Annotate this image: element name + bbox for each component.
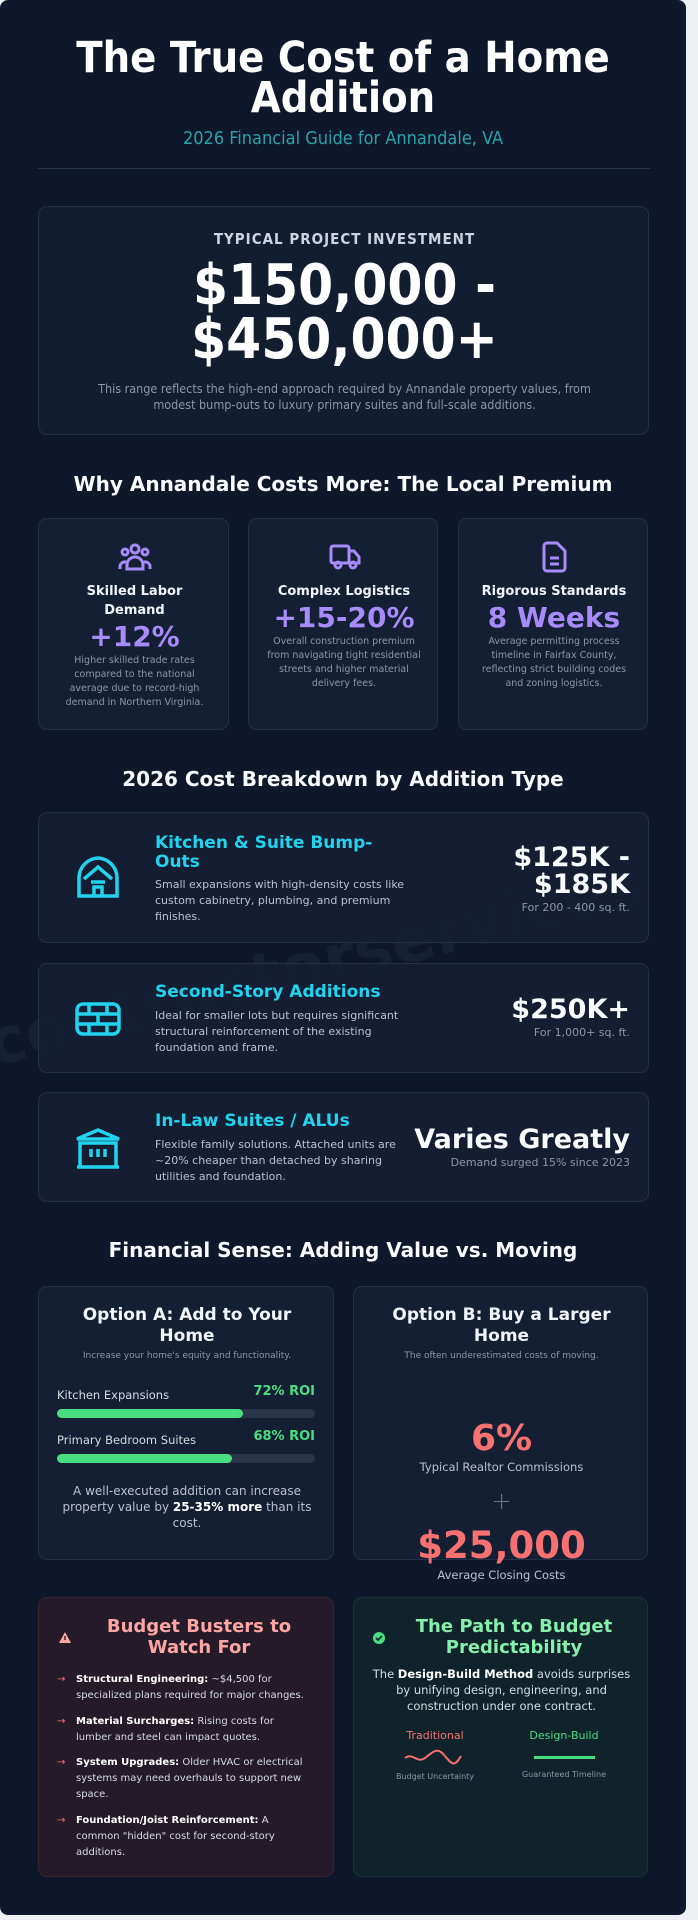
text: from navigating tight residential — [267, 650, 421, 661]
text: timeline in Fairfax County, — [492, 650, 616, 661]
bar: kitchen — [57, 1384, 315, 1418]
title: Predictability — [446, 1637, 582, 1658]
text: Overall construction premium — [273, 636, 415, 647]
text: Average permitting process — [488, 636, 620, 647]
price: $125K - — [513, 842, 630, 873]
title: Option A: Add to Your — [83, 1305, 291, 1325]
list: Material Surcharges: Rising costs for lumber and steel can impact quotes. — [76, 1716, 274, 1742]
text: +12% — [89, 620, 180, 653]
list — [57, 1674, 304, 1858]
icon: truck — [330, 544, 360, 570]
panel: design-build — [353, 1597, 648, 1877]
text: Small expansions with high-density costs like custom cabinetry, plumbing, and premium finishes. — [155, 878, 404, 923]
text: and zoning logistics. — [505, 678, 603, 689]
stat: closing costs: $25,000 — [417, 1524, 586, 1567]
heading: cost breakdown: 2026 Cost Breakdown by Addition Type — [122, 767, 564, 791]
text: Higher skilled trade rates — [74, 655, 195, 666]
stat: closing costs: Average Closing Costs — [437, 1568, 566, 1582]
text: Skilled Labor — [87, 584, 182, 599]
text — [155, 833, 404, 923]
bar: primary suites: Primary Bedroom Suites — [57, 1433, 196, 1447]
comparison: traditional — [396, 1729, 474, 1781]
text: Second-Story Additions — [155, 982, 380, 1002]
comparison: design-build: Design-Build — [529, 1729, 599, 1742]
price: For 1,000+ sq. ft. — [534, 1026, 630, 1039]
label: TYPICAL PROJECT INVESTMENT — [214, 230, 475, 248]
icon: document — [542, 542, 566, 572]
panel: option A: Increase your home's equity and functionality. — [83, 1351, 291, 1361]
note: A well-executed addition can increase property value by 25-35% more than its cost. — [63, 1484, 311, 1530]
list: → — [57, 1674, 65, 1685]
comparison: design-build — [522, 1729, 606, 1778]
text: Demand — [104, 603, 165, 618]
bar: primary suites: 68% ROI — [253, 1429, 315, 1444]
description: This range reflects the high-end approach required by Annandale property values, from modest bump-outs to luxury primary suites and full-scale additions. — [98, 381, 591, 412]
title — [76, 33, 610, 123]
icon: warning — [59, 1632, 71, 1643]
stat: commissions: Typical Realtor Commissions — [420, 1460, 583, 1474]
panel: second-story — [38, 963, 649, 1073]
title: The True Cost of a Home — [76, 33, 610, 83]
stat: commissions — [420, 1418, 583, 1474]
text: +15-20% — [273, 601, 415, 634]
stat: commissions: 6% — [471, 1418, 532, 1459]
title — [416, 1616, 612, 1658]
text — [155, 982, 398, 1054]
heading: local premium: Why Annandale Costs More: The Local Premium — [74, 472, 612, 496]
text: demand in Northern Virginia. — [66, 697, 203, 708]
panel: option B: The often underestimated costs of moving. — [404, 1351, 599, 1361]
price range: $450,000+ — [191, 307, 498, 372]
price — [414, 1124, 630, 1169]
subtitle: 2026 Financial Guide for Annandale, VA — [183, 128, 503, 149]
text: compared to the national — [74, 669, 195, 680]
icon: building — [76, 1128, 120, 1169]
comparison: design-build: Guaranteed Timeline — [522, 1770, 606, 1778]
heading: financial sense: Financial Sense: Adding Value vs. Moving — [109, 1238, 577, 1262]
text: Kitchen & Suite Bump- — [155, 833, 372, 853]
price: Varies Greatly — [414, 1124, 630, 1155]
icon: check — [373, 1632, 385, 1644]
title: Addition — [251, 73, 435, 123]
bar: primary suites — [57, 1429, 315, 1463]
panel: rigorous standards — [458, 518, 648, 730]
text — [267, 584, 421, 689]
text: The Design-Build Method avoids surprises by unifying design, engineering, and construction under one contract. — [373, 1667, 630, 1713]
price — [511, 994, 630, 1039]
comparison: traditional: Budget Uncertainty — [396, 1772, 474, 1781]
title: Budget Busters to — [107, 1616, 291, 1637]
text — [66, 584, 203, 708]
panel: option A — [38, 1286, 334, 1560]
icon: layers — [75, 1002, 121, 1036]
price: For 200 - 400 sq. ft. — [522, 901, 630, 914]
price range — [191, 253, 498, 372]
list: Foundation/Joist Reinforcement: A common "hidden" cost for second-story additions. — [76, 1814, 275, 1858]
text: Ideal for smaller lots but requires significant structural reinforcement of the existing foundation and frame. — [155, 1009, 398, 1054]
panel: typical project investment — [38, 206, 649, 435]
bar: kitchen: Kitchen Expansions — [57, 1388, 169, 1402]
title — [107, 1616, 291, 1658]
list: System Upgrades: Older HVAC or electrical systems may need overhauls to support new space. — [76, 1757, 303, 1800]
panel: budget busters — [38, 1597, 334, 1877]
price: Demand surged 15% since 2023 — [451, 1156, 630, 1169]
panel: complex logistics — [248, 518, 438, 730]
panel: in-law suites — [38, 1092, 649, 1202]
panel: kitchen bump-outs — [38, 812, 649, 943]
price range: $150,000 - — [193, 253, 496, 318]
text — [482, 584, 626, 689]
text: reflecting strict building codes — [482, 664, 626, 675]
panel: option B — [353, 1286, 648, 1560]
list: → — [57, 1757, 65, 1768]
price — [513, 842, 631, 914]
title: Home — [159, 1326, 215, 1346]
watermark: contractorservices — [0, 847, 651, 1082]
panel: option B: Option B: Buy a Larger — [392, 1305, 611, 1325]
text: Rigorous Standards — [482, 584, 626, 599]
icon: house — [77, 856, 119, 898]
list: → — [57, 1814, 65, 1826]
text: In-Law Suites / ALUs — [155, 1111, 350, 1131]
panel: skilled labor — [38, 518, 229, 730]
list: Structural Engineering: ~$4,500 for specialized plans required for major changes. — [76, 1674, 304, 1701]
text: streets and higher material — [279, 664, 409, 675]
text: average due to record-high — [70, 683, 199, 694]
title: Watch For — [148, 1637, 250, 1658]
title — [83, 1305, 292, 1346]
text: Flexible family solutions. Attached units are ~20% cheaper than detached by sharing utilities and foundation. — [155, 1138, 396, 1183]
price: $250K+ — [511, 994, 630, 1025]
text — [155, 1111, 396, 1183]
panel: option B: Home — [474, 1326, 529, 1346]
text: delivery fees. — [312, 678, 376, 689]
icon: people — [118, 544, 152, 570]
text: 8 Weeks — [488, 601, 620, 634]
list: → — [57, 1716, 65, 1726]
title: The Path to Budget — [416, 1616, 612, 1637]
text: Outs — [155, 852, 200, 872]
text: Complex Logistics — [278, 584, 410, 599]
panel: option B: + — [491, 1487, 512, 1515]
comparison: traditional: Traditional — [406, 1729, 464, 1742]
price: $185K — [534, 869, 630, 900]
bar: kitchen: 72% ROI — [253, 1384, 315, 1399]
